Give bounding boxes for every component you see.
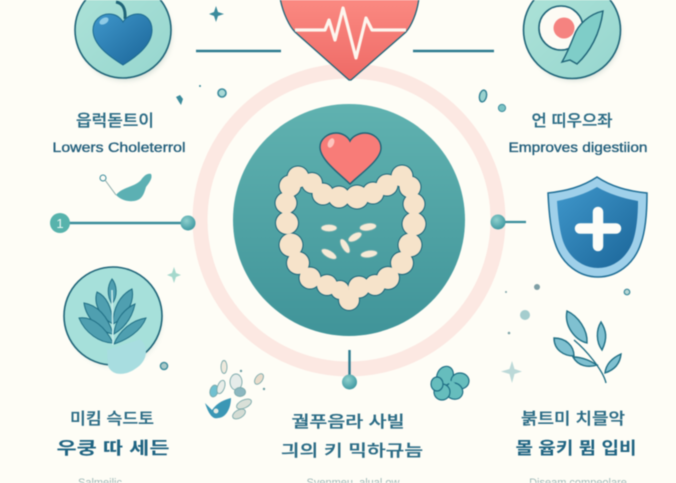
seeds inside colon: [320, 222, 378, 261]
connector 1 left: 1: [56, 216, 64, 231]
label: bottom centre: 궐푸음라 사빌: [292, 413, 404, 431]
label: bottom left: [56, 410, 170, 483]
connector 1 left: [50, 213, 196, 233]
heart above colon: [320, 133, 381, 184]
pink ring around centre: [200, 71, 498, 369]
label: improves digestion: Emproves digestiion: [508, 140, 648, 155]
connector bottom: [342, 350, 357, 390]
icon: digestion plate and leaf: [524, 0, 620, 80]
label: bottom centre: 긔의 키 믹하규늠: [281, 442, 423, 460]
icon: shield with plus: [548, 177, 647, 277]
icon: leaf circle: [64, 267, 162, 374]
connector right: [490, 214, 526, 230]
plus sign: [580, 212, 616, 246]
icon: leafy branch: [554, 311, 621, 383]
label: bottom right: 몰 윱키 뮘 입비: [516, 439, 636, 458]
icon: seed cluster: [205, 360, 265, 421]
connector lines beside heart: [196, 50, 494, 52]
small sparkle and dot lower left: [160, 267, 181, 370]
colon illustration: [274, 164, 426, 311]
label: bottom right: 붉트미 치믈악: [521, 410, 625, 428]
label: improves digestion: [508, 112, 648, 155]
icon: small spoon: [100, 174, 152, 201]
icon: blue apple heart: [75, 0, 171, 80]
label: bottom right: [516, 410, 636, 483]
label: improves digestion: 언 띠우으좌: [532, 112, 613, 130]
icon: teal flower: [431, 364, 469, 402]
label: bottom centre: [281, 413, 423, 483]
label: bottom left: 우쿵 따 세든: [56, 439, 170, 458]
pulse line: [295, 8, 406, 58]
small sparkles and dots upper area: [176, 6, 506, 112]
label: lowers cholesterol: 읍럭돋트이: [76, 112, 154, 130]
icon: sparkle and dots lower right: [501, 284, 630, 383]
label: lowers cholesterol: Lowers Choleterrol: [52, 140, 186, 155]
label: lowers cholesterol: [52, 112, 186, 155]
label: bottom left: 미킴 슥드토: [70, 410, 154, 428]
central teal circle with colon: [233, 104, 465, 336]
big heart with pulse line: [280, 0, 419, 80]
